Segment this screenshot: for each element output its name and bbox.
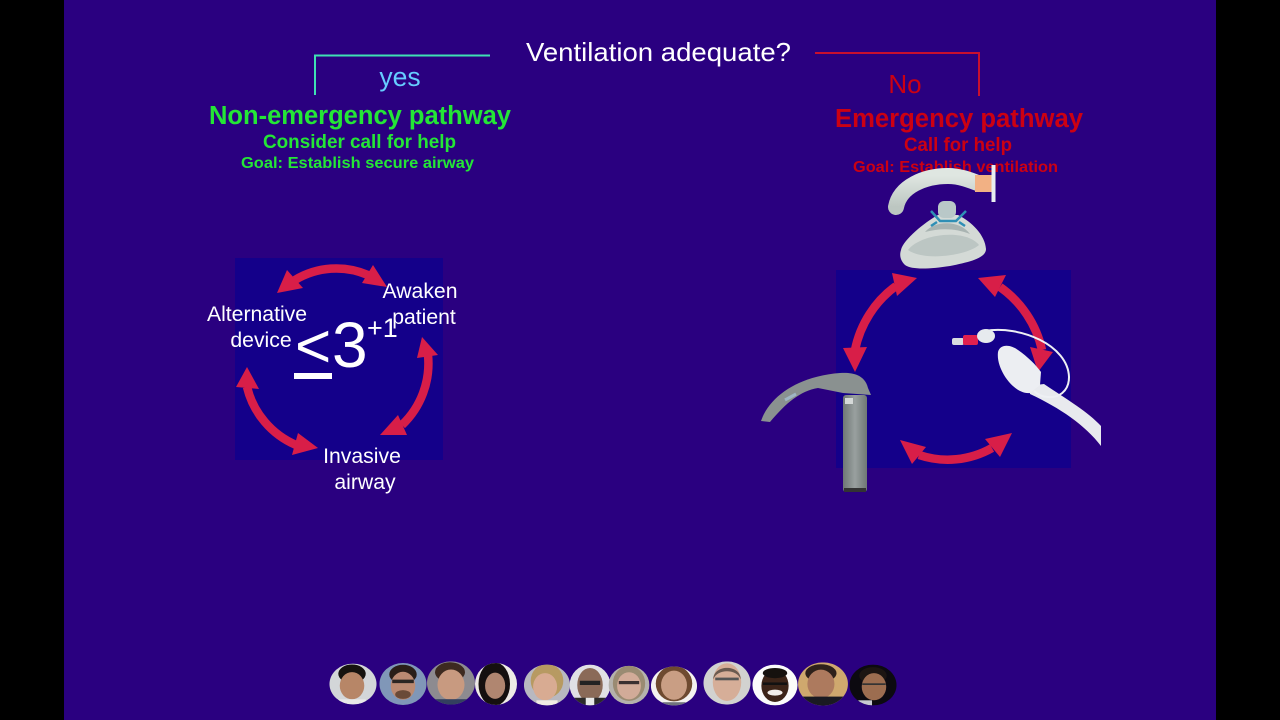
no label: No — [888, 69, 922, 99]
limit: at most three plus one attempts — [294, 309, 398, 381]
limit: at most three plus one attempts: +1 — [367, 313, 398, 343]
icon: laryngeal mask airway — [952, 329, 1101, 446]
consider call for help: Consider call for help — [263, 131, 456, 153]
emergency heading: Emergency pathway — [835, 105, 1084, 133]
arrow: alternative device to awaken patient — [277, 265, 387, 293]
limit: at most three plus one attempts: < — [295, 312, 331, 381]
portrait 3 — [427, 661, 475, 706]
portrait 2 — [379, 663, 427, 705]
portrait 6 — [570, 665, 610, 706]
panel: non-emergency cycle — [207, 258, 458, 494]
icon: face mask — [900, 201, 986, 268]
non-emergency pathway text block — [209, 102, 512, 172]
left panel background — [235, 258, 443, 460]
right panel background — [836, 270, 1071, 468]
portrait 7 — [609, 666, 649, 704]
call for help: Call for help — [904, 134, 1012, 156]
label: awaken patient: patient — [392, 306, 456, 329]
label: alternative device: device — [230, 329, 292, 352]
portrait 1 — [329, 664, 377, 706]
arrow: awaken patient to invasive airway — [380, 337, 438, 435]
portrait 10 — [752, 665, 798, 705]
portrait 12 — [849, 665, 897, 706]
faculty photo strip — [329, 661, 897, 707]
arrow: mask to laryngoscope — [843, 273, 917, 372]
portrait 8 — [651, 666, 697, 706]
icon: laryngoscope — [761, 373, 871, 492]
label: awaken patient: Awaken — [382, 280, 458, 303]
yes label: yes — [379, 62, 421, 92]
non-emergency heading: Non-emergency pathway — [209, 102, 512, 130]
goal: ventilation: Goal: Establish ventilation — [853, 159, 1058, 176]
arrow: mask to supraglottic airway — [978, 275, 1053, 372]
label: alternative device: Alternative — [207, 303, 307, 326]
arrow: laryngoscope to supraglottic airway — [900, 433, 1012, 464]
no branch connector — [815, 53, 979, 96]
label: invasive airway: Invasive — [323, 445, 401, 468]
portrait 11 — [798, 662, 848, 707]
portrait 4 — [475, 662, 517, 706]
label: invasive airway: airway — [334, 471, 396, 494]
emergency pathway text block — [835, 105, 1084, 176]
icon: oropharyngeal airway — [896, 165, 996, 207]
question heading: Ventilation adequate? — [526, 37, 791, 67]
panel: emergency cycle — [836, 270, 1071, 468]
portrait 9 — [703, 661, 751, 705]
goal: secure airway: Goal: Establish secure airway — [241, 155, 474, 172]
arrow: invasive airway to alternative device — [236, 367, 318, 455]
yes branch connector — [315, 56, 490, 95]
portrait 5 — [524, 664, 570, 707]
limit: at most three plus one attempts: 3 — [332, 309, 368, 381]
